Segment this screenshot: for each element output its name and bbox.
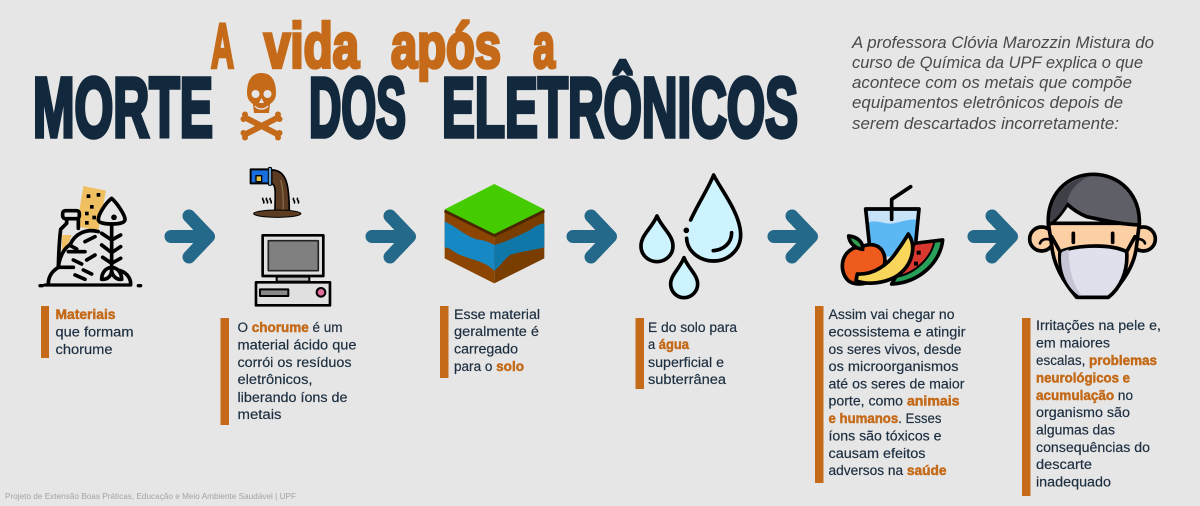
text block 3: solo: Esse material bbox=[454, 307, 540, 323]
text block 1: materiais bbox=[41, 306, 134, 358]
icon: soil block bbox=[445, 184, 544, 283]
intro text: acontece com os metais que compõe bbox=[852, 73, 1132, 92]
text block 6: consequências: consequências do bbox=[1036, 440, 1150, 456]
text block 2: chorume: corrói os resíduos bbox=[238, 355, 352, 371]
text block 4: água: E do solo para bbox=[648, 320, 737, 336]
intro text: curso de Química da UPF explica o que bbox=[852, 53, 1143, 72]
title line 2: morte dos eletrônicos: DOS bbox=[309, 60, 406, 154]
text block 6: consequências: inadequado bbox=[1036, 474, 1111, 490]
intro text: equipamentos eletrônicos depois de bbox=[852, 93, 1123, 112]
text block 5: ecossistema: ecossistema e atingir bbox=[828, 324, 966, 340]
text block 6: consequências: Irritações na pele e, bbox=[1036, 318, 1161, 334]
text block 5: ecossistema: até os seres de maior bbox=[828, 376, 965, 392]
icon: water drops bbox=[641, 175, 741, 298]
arrow 2 bbox=[372, 216, 410, 257]
text block 6: consequências: acumulação no bbox=[1036, 388, 1133, 404]
title line 2: morte dos eletrônicos bbox=[33, 60, 798, 154]
text block 2: chorume: material ácido que bbox=[238, 338, 357, 354]
text block 3: solo bbox=[440, 306, 540, 378]
text block 2: chorume bbox=[220, 318, 357, 425]
title line 1: A vida após a: vida bbox=[264, 12, 360, 82]
text block 2: chorume: O chorume é um bbox=[238, 320, 342, 336]
text block 5: ecossistema: causam efeitos bbox=[828, 446, 926, 462]
icon: leachate pouring and computer bbox=[251, 167, 330, 305]
text block 5: ecossistema: adversos na saúde bbox=[828, 463, 947, 479]
text block 6: consequências: neurológicos e bbox=[1036, 370, 1130, 386]
title line 1: A vida após a: após bbox=[391, 12, 501, 82]
text block 6: consequências: algumas das bbox=[1036, 422, 1115, 438]
icon: skull and crossbones bbox=[240, 73, 282, 140]
text block 4: água: subterrânea bbox=[648, 372, 726, 388]
text block 4: água: superficial e bbox=[648, 355, 724, 371]
arrow 4 bbox=[774, 216, 812, 257]
text block 5: ecossistema bbox=[815, 306, 966, 483]
text block 4: água bbox=[636, 318, 737, 389]
text block 1: materiais: Materiais bbox=[56, 307, 116, 323]
icon: glass and fruits bbox=[842, 187, 943, 284]
text block 2: chorume: liberando íons de bbox=[238, 390, 348, 406]
title line 2: morte dos eletrônicos: MORTE bbox=[33, 60, 213, 154]
text block 3: solo: carregado bbox=[454, 342, 518, 358]
text block 6: consequências: descarte bbox=[1036, 457, 1092, 473]
text block 6: consequências: em maiores bbox=[1036, 336, 1110, 352]
text block 2: chorume: eletrônicos, bbox=[238, 372, 312, 388]
icon: waste pile bbox=[40, 186, 141, 286]
title line 1: A vida após a: A bbox=[211, 12, 234, 82]
footer credit: Projeto de Extensão Boas Práticas, Educação e Meio Ambiente Saudável | UPF bbox=[5, 491, 296, 501]
text block 1: materiais: que formam bbox=[56, 324, 134, 340]
text block 5: ecossistema: os seres vivos, desde bbox=[828, 342, 962, 358]
text block 5: ecossistema: íons são tóxicos e bbox=[828, 428, 942, 444]
text block 6: consequências: escalas, problemas bbox=[1036, 353, 1157, 369]
text block 5: ecossistema: os microorganismos bbox=[828, 359, 958, 375]
icon: person with face mask bbox=[1030, 174, 1155, 297]
text block 5: ecossistema: e humanos. Esses bbox=[828, 411, 942, 427]
intro text bbox=[851, 33, 1154, 133]
text block 4: água: a água bbox=[648, 337, 689, 353]
intro text: A professora Clóvia Marozzin Mistura do bbox=[851, 33, 1154, 52]
text block 6: consequências: organismo são bbox=[1036, 405, 1130, 421]
text block 5: ecossistema: porte, como animais bbox=[828, 394, 960, 410]
title line 1: A vida após a bbox=[211, 12, 556, 82]
text block 6: consequências bbox=[1022, 318, 1161, 496]
intro text: serem descartados incorretamente: bbox=[852, 114, 1119, 133]
text block 3: solo: geralmente é bbox=[454, 324, 539, 340]
text block 2: chorume: metais bbox=[238, 407, 282, 423]
title line 2: morte dos eletrônicos: ELETRÔNICOS bbox=[442, 60, 798, 154]
text block 1: materiais: chorume bbox=[56, 342, 113, 358]
arrow 1 bbox=[171, 216, 208, 257]
text block 3: solo: para o solo bbox=[454, 359, 524, 375]
arrow 5 bbox=[974, 216, 1012, 257]
title line 1: A vida após a: a bbox=[533, 12, 556, 82]
arrow 3 bbox=[573, 216, 610, 257]
text block 5: ecossistema: Assim vai chegar no bbox=[828, 307, 955, 323]
